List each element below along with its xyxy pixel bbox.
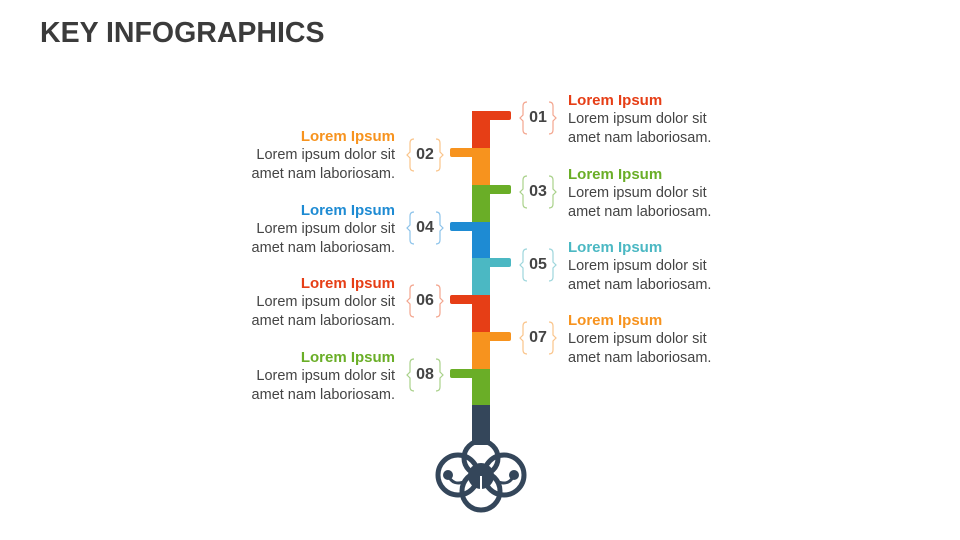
text 03: Lorem ipsum dolor sit xyxy=(568,185,707,201)
text 03: Lorem Ipsum xyxy=(568,166,662,183)
text 07: Lorem ipsum dolor sit xyxy=(568,331,707,347)
text 01: amet nam laboriosam. xyxy=(568,130,711,146)
text 08: Lorem Ipsum xyxy=(301,349,395,366)
text 05 xyxy=(568,239,711,293)
text 01: Lorem Ipsum xyxy=(568,92,662,109)
text 06 xyxy=(252,275,395,329)
title: KEY INFOGRAPHICS xyxy=(40,17,325,49)
text 08: Lorem ipsum dolor sit xyxy=(256,368,395,384)
text 06: Lorem Ipsum xyxy=(301,275,395,292)
brackets xyxy=(407,102,556,391)
text: 01 xyxy=(529,109,547,126)
text 05: amet nam laboriosam. xyxy=(568,277,711,293)
text 03: amet nam laboriosam. xyxy=(568,204,711,220)
text 01: Lorem ipsum dolor sit xyxy=(568,111,707,127)
text 05: Lorem Ipsum xyxy=(568,239,662,256)
text: 08 xyxy=(416,366,434,383)
text 02: Lorem ipsum dolor sit xyxy=(256,147,395,163)
text 04: Lorem ipsum dolor sit xyxy=(256,221,395,237)
text 08 xyxy=(252,349,395,403)
text 07 xyxy=(568,312,711,366)
text 05: Lorem ipsum dolor sit xyxy=(568,258,707,274)
numbers xyxy=(416,109,547,383)
text 02 xyxy=(252,128,395,182)
text 04 xyxy=(252,202,395,256)
text 01 xyxy=(568,92,711,146)
text 03 xyxy=(568,166,711,220)
text: 03 xyxy=(529,183,547,200)
text 07: amet nam laboriosam. xyxy=(568,350,711,366)
text: 02 xyxy=(416,146,434,163)
text 04: amet nam laboriosam. xyxy=(252,240,395,256)
text: 07 xyxy=(529,329,547,346)
text 04: Lorem Ipsum xyxy=(301,202,395,219)
text 06: Lorem ipsum dolor sit xyxy=(256,294,395,310)
text 02: amet nam laboriosam. xyxy=(252,166,395,182)
text 07: Lorem Ipsum xyxy=(568,312,662,329)
text 06: amet nam laboriosam. xyxy=(252,313,395,329)
text: 05 xyxy=(529,256,547,273)
text: 04 xyxy=(416,219,434,236)
text 02: Lorem Ipsum xyxy=(301,128,395,145)
text: 06 xyxy=(416,292,434,309)
text 08: amet nam laboriosam. xyxy=(252,387,395,403)
